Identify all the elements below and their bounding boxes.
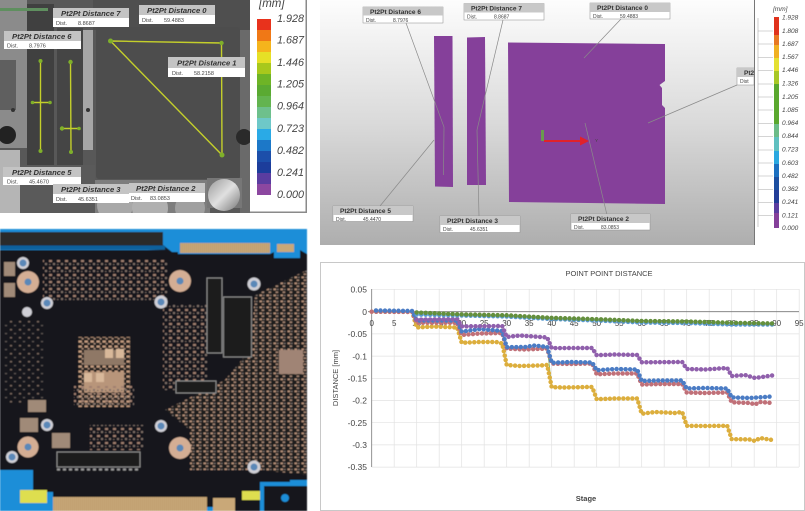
label: Pt2Pt Distance 6: 8.7976 [393,18,409,24]
scale values: 0.241 [782,199,799,206]
scale values: 1.567 [782,54,799,61]
scale values [782,14,799,232]
x axis labels: 70 [682,319,692,328]
label: Pt2Pt Distance 7: 8.8687 [78,21,95,27]
label: Pt2Pt Distance 5: Pt2Pt Distance 5 [12,168,72,177]
label: Pt2Pt Distance 1: 58.2158 [194,71,214,77]
scale values: 1.808 [782,28,799,35]
label: Pt2Pt Distance 5 [3,167,81,186]
grid lines [372,289,799,467]
x axis labels: 45 [570,319,579,328]
series connector lines [412,312,732,439]
label: Pt2Pt Distance 5: Pt2Pt Distance 5 [340,208,391,215]
label: Pt2Pt Distance 3: 45.6351 [470,227,488,233]
pad row under lower component [57,468,140,470]
series: yellow [372,312,772,441]
y axis labels: -0.05 [348,329,367,339]
scale unit: [mm] [772,6,788,13]
label: Pt2Pt Distance 3: 45.6351 [78,197,98,203]
color bar [774,17,779,228]
left pad clusters [4,262,70,448]
label: Pt2Pt Distance 1 [168,57,245,77]
label: Pt2Pt Distance 1: Dist. [172,71,183,77]
label: Pt2Pt Distance 3 [53,184,129,203]
scale values: 0.603 [782,160,799,167]
scale values: 1.928 [782,14,799,22]
x axis labels: 65 [660,319,669,328]
x axis labels: 10 [412,319,422,328]
x axis labels: 90 [772,319,782,328]
scale values: 1.205 [277,78,305,90]
scale values: 0.964 [782,120,799,127]
scale values: 1.446 [277,57,304,69]
x axis labels: 55 [615,319,624,328]
scale values: 0.121 [782,212,799,220]
scale values: 1.205 [782,94,799,101]
label: Pt2Pt Distance 6: Dist. [7,44,18,50]
x axis labels: 30 [502,319,512,328]
label: Pt2Pt Distance 2 [571,214,650,231]
scale values [277,13,305,201]
label: Pt2Pt Distance 6 [363,7,443,24]
label: Pt2Pt Distance 6: Pt2Pt Distance 6 [12,32,72,41]
label: Pt2Pt Distance 2 [129,183,205,202]
color bar [257,19,271,195]
label: Pt2Pt Distance 2: Dist. [131,196,142,202]
bottom right corner [264,486,308,511]
label: Pt2Pt Distance 0: Pt2Pt Distance 0 [597,5,648,12]
panel: PCB photograph [0,229,307,511]
silver mounting holes [6,257,260,474]
label: Pt2Pt Distance 6: 8.7976 [29,44,46,50]
label: Pt2Pt Distance 1 (clipped): Dist [740,79,749,85]
y axis labels [348,284,367,472]
label: Pt2Pt Distance 5: 45.4670 [29,180,49,186]
top connector bar [0,232,163,245]
x axis labels: 80 [727,319,737,328]
label: Pt2Pt Distance 3: Dist. [56,197,67,203]
y axis labels: -0.3 [352,440,367,450]
x axis labels: 95 [795,319,804,328]
label: Pt2Pt Distance 5 [333,206,413,223]
y axis labels: -0.35 [348,462,367,472]
label: Pt2Pt Distance 0: Dist. [593,14,603,20]
sparse pad regions [5,258,208,450]
x axis title: Stage [576,494,596,503]
scale values: 1.326 [782,80,799,88]
yellow tabs [20,490,260,503]
label: Pt2Pt Distance 2: Pt2Pt Distance 2 [578,216,629,223]
x axis labels: 20 [457,319,467,328]
panel: 3D analysis view [320,0,754,245]
label: Pt2Pt Distance 0 [139,5,215,24]
label: Pt2Pt Distance 6: Dist. [366,18,376,24]
label: Pt2Pt Distance 1 (clipped): Pt2 [744,70,754,77]
label: Pt2Pt Distance 0: 59.4883 [164,18,184,24]
x axis labels: 75 [705,319,714,328]
scale values: 1.687 [277,34,305,46]
x axis labels: 85 [750,319,759,328]
label: Pt2Pt Distance 5: Dist. [7,180,18,186]
chart title: POINT POINT DISTANCE [565,269,653,278]
right dense component area [165,270,307,475]
scale values: 0.362 [782,186,799,193]
y axis labels: -0.25 [348,418,367,428]
camera photograph background [0,0,252,226]
scale values: 1.928 [277,13,304,25]
scale values: 0.000 [782,225,799,232]
blue background [0,229,307,511]
label: Pt2Pt Distance 7 [53,8,129,27]
PCB board body [0,232,307,511]
scale values: 0.723 [782,146,799,154]
panel: line chart [320,262,804,510]
leader lines [380,19,737,216]
label: Pt2Pt Distance 7: Dist. [56,21,67,27]
x axis labels: 25 [480,319,489,328]
label: Pt2Pt Distance 3: Pt2Pt Distance 3 [447,218,498,225]
scale values: 0.000 [277,189,304,201]
x axis labels: 5 [392,319,397,328]
label: Pt2Pt Distance 7: 8.8687 [494,14,510,20]
scale values: 1.446 [782,67,799,74]
label: Pt2Pt Distance 1 (clipped) [737,68,754,85]
label: Pt2Pt Distance 2: 83.0853 [150,196,170,202]
scale values: 0.844 [782,133,799,140]
x axis labels: 0 [369,319,374,328]
label: Pt2Pt Distance 6: Pt2Pt Distance 6 [370,9,421,16]
y axis labels: -0.2 [352,396,367,406]
y axis labels: 0.05 [350,284,367,294]
label: Pt2Pt Distance 3: Dist. [443,227,453,233]
scale values: 1.085 [782,107,799,114]
coordinate axes: Y [595,138,598,143]
scale values: 0.964 [277,100,304,112]
y axis labels: 0 [362,307,367,317]
x axis labels: 15 [435,319,444,328]
panel: camera image with distance measurements [0,0,252,226]
label: Pt2Pt Distance 0: 59.4883 [620,14,638,20]
label: Pt2Pt Distance 7: Pt2Pt Distance 7 [471,6,522,12]
x axis labels: 35 [525,319,534,328]
silver outline components [57,278,252,467]
label: Pt2Pt Distance 0: Dist. [142,18,153,24]
scale tick lines [758,18,773,227]
label: Pt2Pt Distance 2: Dist. [574,225,584,231]
top gold fingers [180,243,294,253]
y axis labels: -0.15 [348,374,367,384]
label: Pt2Pt Distance 7: Dist. [467,14,477,20]
scale values: 0.241 [277,167,304,179]
measurement lines [32,41,222,155]
copper mounting holes [17,270,191,459]
x axis labels: 40 [547,319,557,328]
scale values: 0.723 [277,123,304,135]
purple deformation plate with notch [508,42,665,204]
label: Pt2Pt Distance 1: Pt2Pt Distance 1 [177,58,237,68]
purple deformation strip middle [467,37,486,185]
center BGA pads [74,337,134,407]
label: Pt2Pt Distance 7: Pt2Pt Distance 7 [61,9,121,18]
label: Pt2Pt Distance 5: 45.4470 [363,217,381,223]
y axis title: DISTANCE [mm] [331,350,340,406]
x axis labels: 60 [637,319,647,328]
x axis labels: 50 [592,319,602,328]
measurement points [31,38,225,158]
label: Pt2Pt Distance 5: Dist. [336,217,346,223]
scale values: 0.482 [277,145,304,157]
label: Pt2Pt Distance 3 [440,216,520,233]
series: light blue [417,314,772,324]
label: Pt2Pt Distance 2: Pt2Pt Distance 2 [136,184,196,193]
series: blue [376,310,772,398]
bottom gold fingers [53,497,235,511]
x axis labels [369,319,804,328]
series: purple [417,319,772,378]
series: green [417,312,772,324]
scale values: 1.687 [782,41,799,48]
label: Pt2Pt Distance 3: Pt2Pt Distance 3 [61,185,121,194]
label: Pt2Pt Distance 2: 83.0853 [601,225,619,231]
blue hole centers [8,260,258,470]
axes [368,289,799,467]
connector pad block [279,350,303,374]
label: Pt2Pt Distance 0: Pt2Pt Distance 0 [147,6,207,15]
coordinate axes [541,130,598,146]
scale values: 0.482 [782,173,799,180]
series: red [372,312,772,404]
purple deformation strip left [434,36,453,187]
panel: color scale for camera image [250,0,307,213]
y axis labels: -0.1 [352,352,367,362]
label: Pt2Pt Distance 7 [464,4,544,20]
panel: color scale for 3D view [754,0,805,245]
label: Pt2Pt Distance 0 [590,3,670,20]
label: Pt2Pt Distance 6 [4,31,81,50]
